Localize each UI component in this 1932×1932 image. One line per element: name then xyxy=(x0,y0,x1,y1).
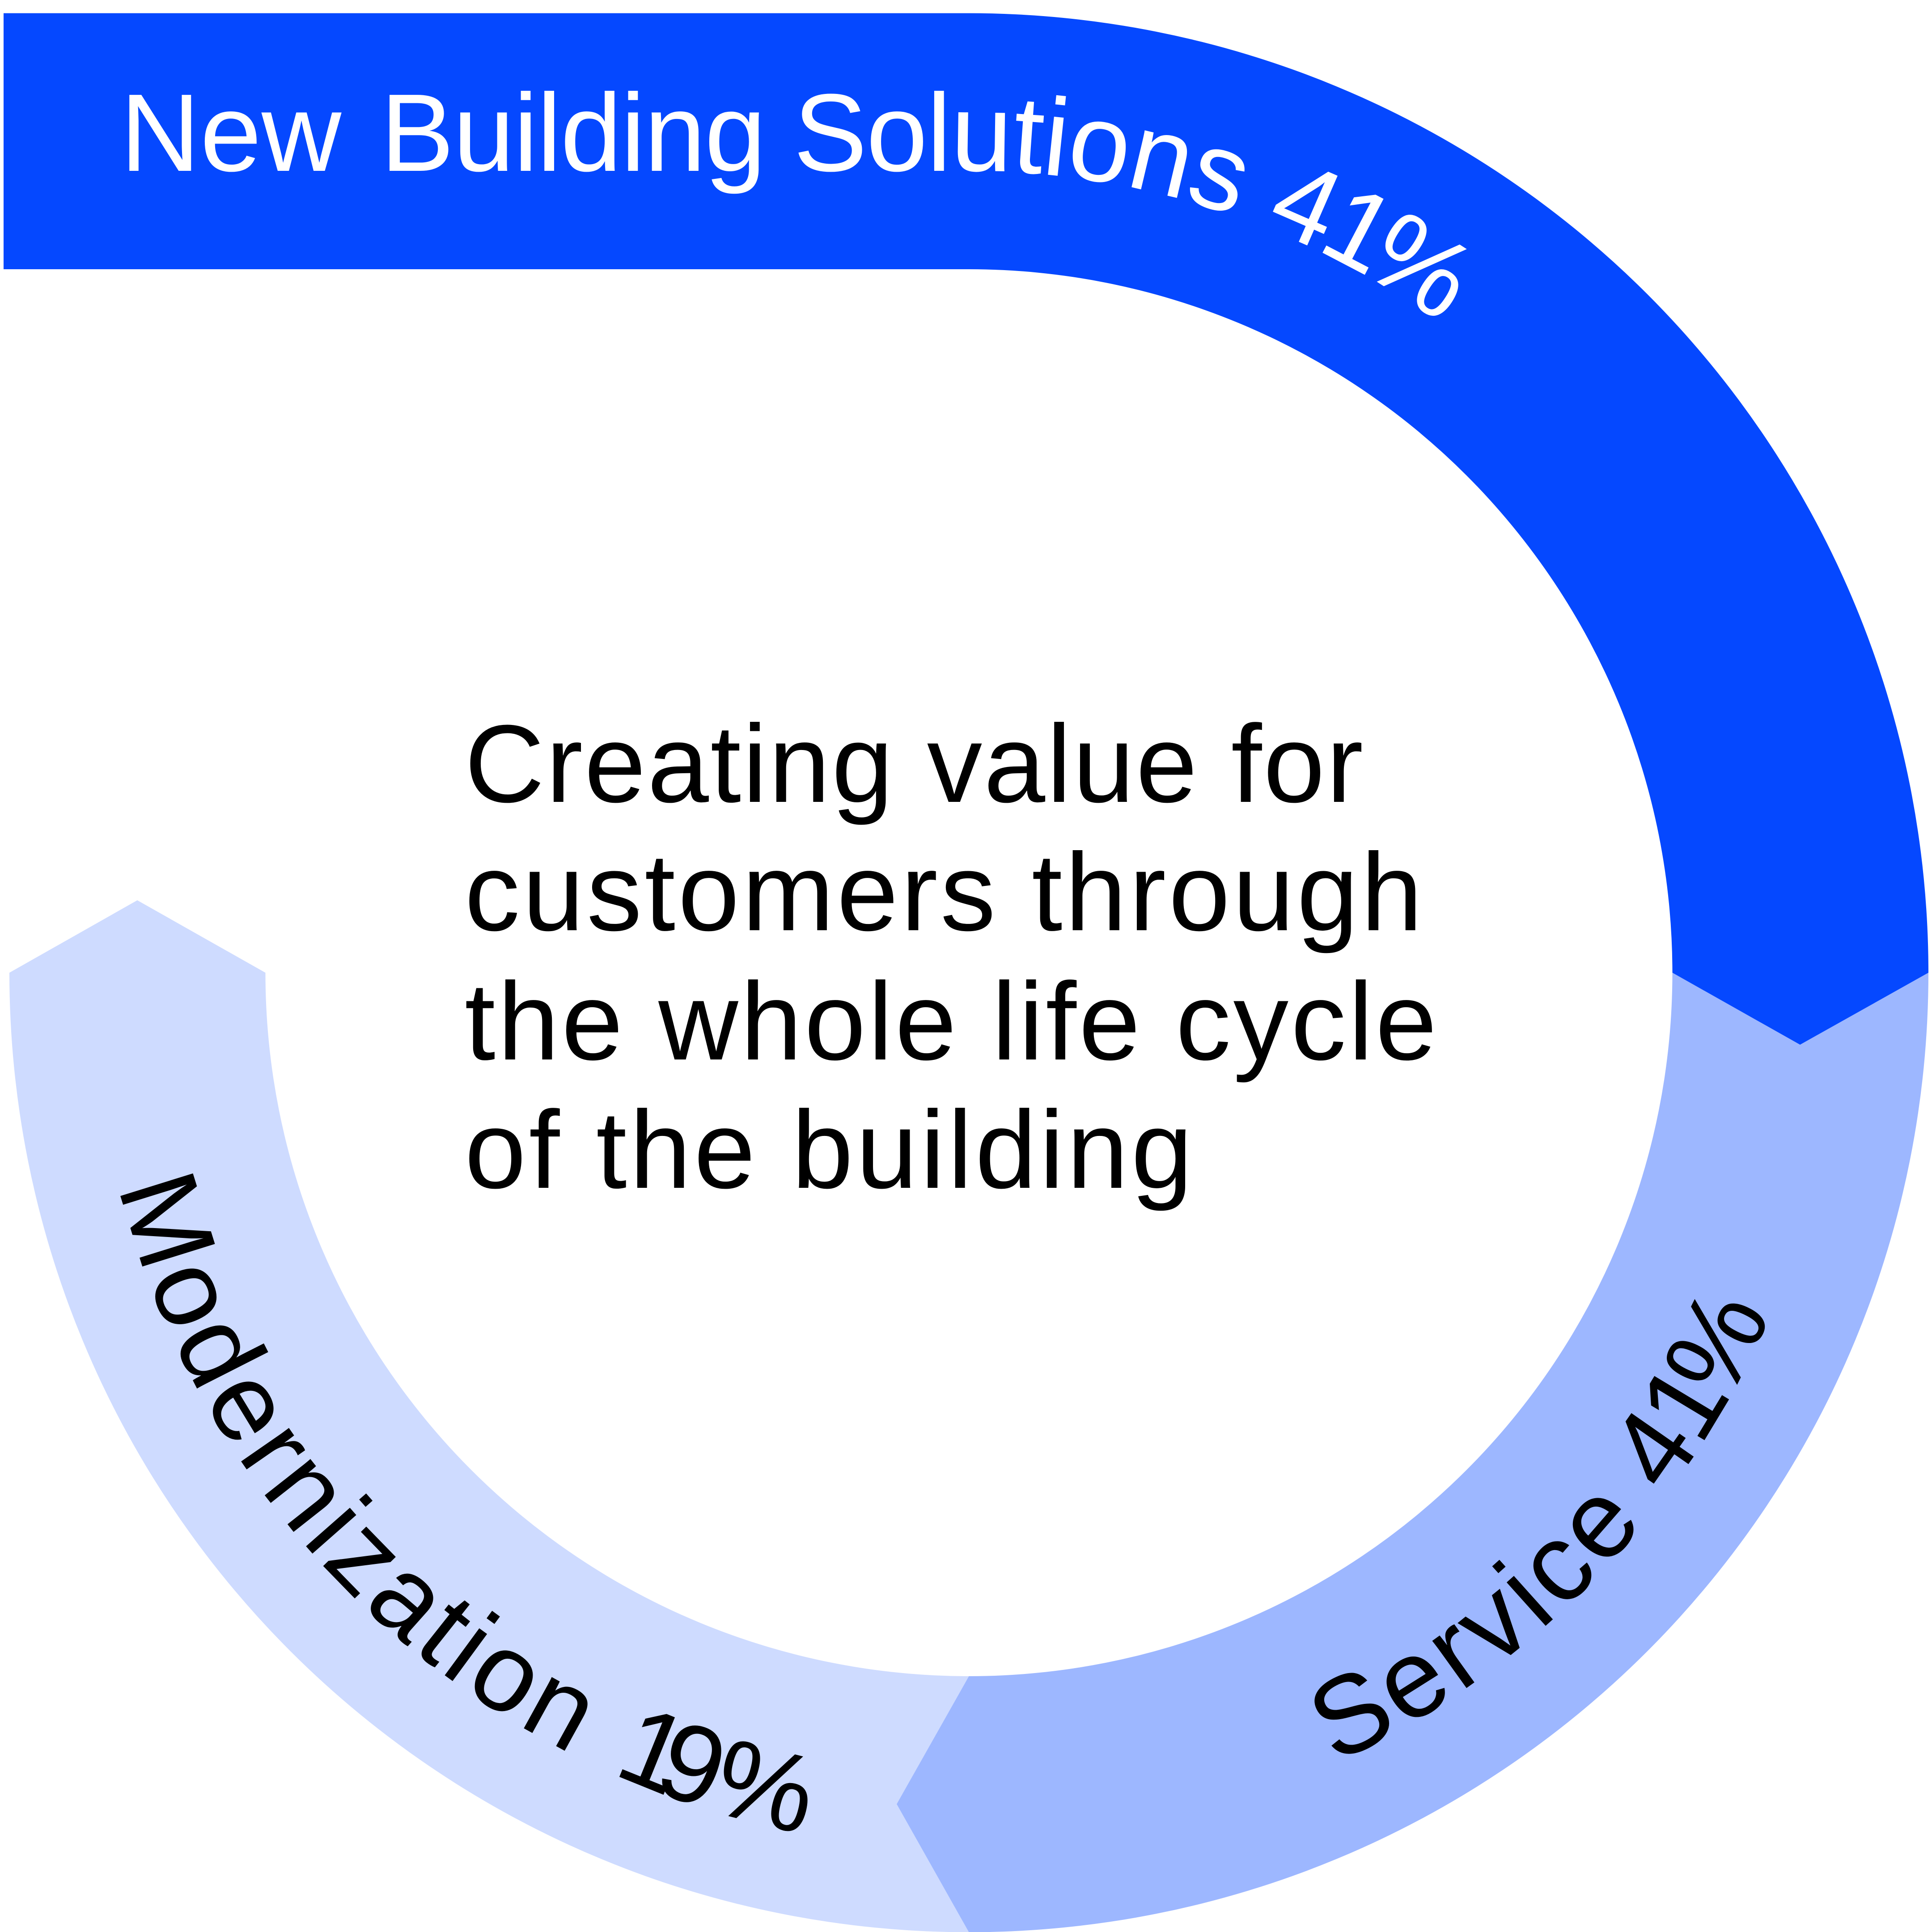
center text: Creating value for customers through the whole life cycle of the building: customers through xyxy=(465,830,1425,954)
label: New Building Solutions 41%: New Building Solutions 41% xyxy=(120,71,1496,344)
center text: Creating value for customers through the whole life cycle of the building: the whole life cycle xyxy=(465,960,1439,1083)
segment: Service xyxy=(897,973,1928,1932)
label: Service 41%: Service 41% xyxy=(1289,1271,1793,1785)
label: Modernization 19%: Modernization 19% xyxy=(95,1158,828,1858)
segment: New Building Solutions xyxy=(4,13,1928,1045)
segment: Modernization xyxy=(9,900,969,1932)
center text: Creating value for customers through the whole life cycle of the building: of the building xyxy=(465,1088,1195,1212)
center text: Creating value for customers through the whole life cycle of the building: Creating value for xyxy=(465,702,1365,826)
center text: Creating value for customers through the whole life cycle of the building xyxy=(465,702,1439,1212)
